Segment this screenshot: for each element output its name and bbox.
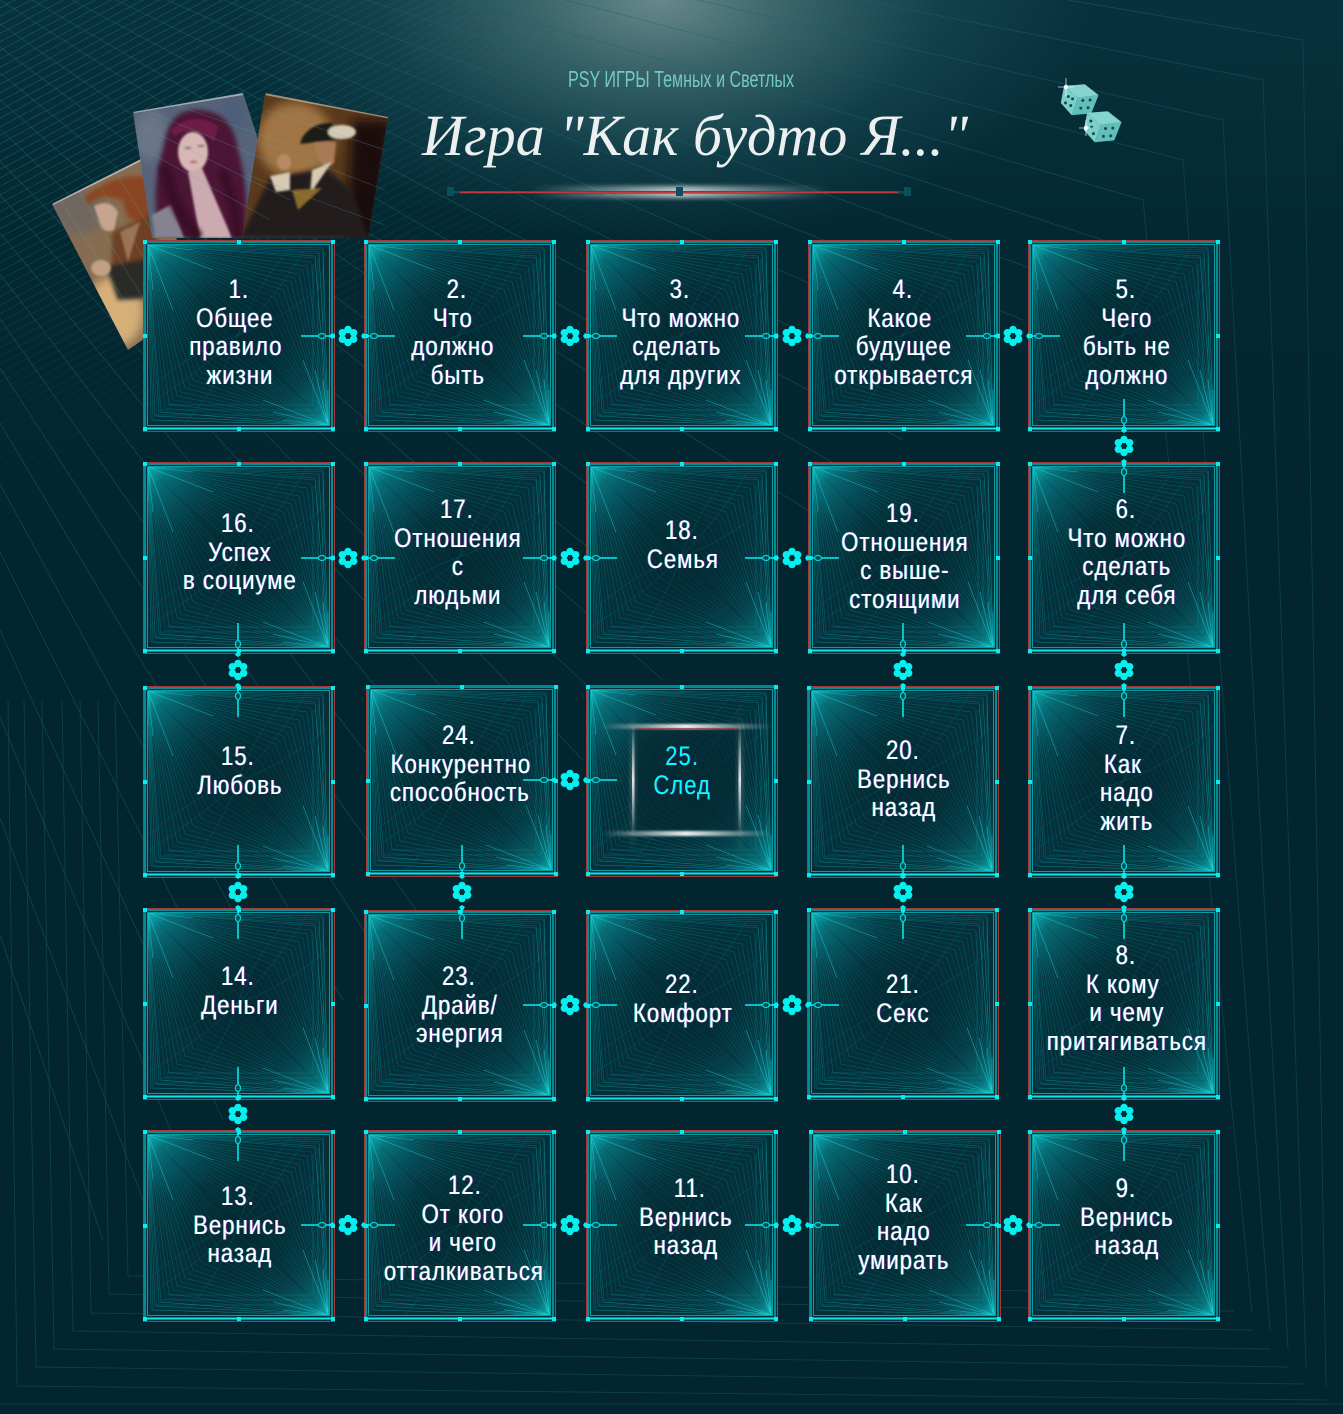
cell 7: жить — [1101, 806, 1153, 836]
cell 11 — [586, 1130, 778, 1322]
cell 4 — [808, 240, 1000, 432]
cell 15: Любовь — [197, 770, 283, 800]
connector 18-19 — [745, 546, 839, 570]
background: upper teal wash — [0, 0, 1343, 480]
cell 8: притягиваться — [1047, 1026, 1207, 1056]
cell 16: Успех — [208, 537, 272, 567]
cell 25: center trace with glowing frame — [586, 685, 778, 877]
cell 4: будущее — [856, 331, 952, 361]
card: musketeer with pipe — [240, 92, 392, 240]
cell 7: 7. — [1116, 720, 1136, 750]
cell 16: в социуме — [183, 565, 297, 595]
cell 20 — [807, 686, 999, 878]
cell 19: стоящими — [849, 584, 961, 614]
cell 11: назад — [654, 1230, 718, 1260]
cell 10: 10. — [886, 1159, 920, 1189]
connector 6-7 — [1114, 623, 1134, 717]
cell 14: 14. — [221, 961, 255, 991]
cell 13 — [143, 1130, 335, 1322]
cell 2: Что — [433, 303, 473, 333]
connector 13-14 — [226, 1067, 250, 1161]
cell 18: 18. — [665, 515, 699, 545]
connector 24-25 — [523, 768, 617, 792]
cell 15: 15. — [221, 741, 255, 771]
cell 11: 11. — [674, 1173, 706, 1203]
cell 4: 4. — [893, 274, 913, 304]
illustration: fanned portrait cards — [52, 93, 388, 350]
cell 8: К кому — [1086, 969, 1160, 999]
cell 5: должно — [1086, 360, 1168, 390]
connector 22-23 — [523, 993, 617, 1017]
connector 14-15 — [226, 845, 250, 939]
cell 9: 9. — [1116, 1173, 1136, 1203]
cell 13: назад — [208, 1238, 272, 1268]
connector 2-3 — [523, 326, 617, 346]
connector 12-13 — [301, 1214, 395, 1236]
cell 8 — [1028, 908, 1220, 1100]
connector 5-6 — [1114, 399, 1134, 493]
cell 9: назад — [1095, 1230, 1159, 1260]
cell 23: 23. — [442, 961, 476, 991]
connector 9-10 — [966, 1214, 1060, 1236]
cell 6: для себя — [1077, 580, 1177, 610]
cell 3: 3. — [670, 274, 690, 304]
connector 15-16 — [226, 623, 250, 717]
cell 10: надо — [877, 1216, 931, 1246]
cell 1: жизни — [207, 360, 273, 390]
cell 25: center trace with glowing frame: След — [653, 770, 711, 800]
cell 22 — [586, 910, 778, 1102]
cell 23 — [364, 910, 556, 1102]
cell 10: Как — [885, 1188, 923, 1218]
cell 17: людьми — [415, 580, 501, 610]
cell 23: Драйв/ — [422, 990, 498, 1020]
connector 21-22 — [745, 993, 839, 1017]
connector 23-24 — [450, 845, 474, 939]
cell 1: правило — [189, 331, 283, 361]
cell 9 — [1028, 1130, 1220, 1322]
cell 20: 20. — [886, 735, 920, 765]
card: woman with burgundy hair — [133, 93, 258, 238]
cell 1 — [143, 240, 335, 432]
cell 16: 16. — [221, 508, 255, 538]
cell 17: с — [452, 551, 464, 581]
connector 1-2 — [301, 326, 395, 346]
card: red-haired man — [52, 160, 177, 350]
cell 7: надо — [1100, 777, 1154, 807]
cell 24: способность — [390, 777, 530, 807]
cell 18: Семья — [647, 544, 719, 574]
icon: dice — [1058, 78, 1122, 142]
cell 11: Вернись — [639, 1202, 733, 1232]
cell 5: 5. — [1116, 274, 1136, 304]
cell 15 — [143, 686, 335, 878]
cell 12 — [364, 1130, 556, 1322]
cell 13: 13. — [221, 1181, 255, 1211]
cell 25: center trace with glowing frame: 25. — [665, 741, 699, 771]
cell 22: Комфорт — [633, 998, 733, 1028]
connector 17-18 — [523, 546, 617, 570]
cell 3: Что можно — [622, 303, 740, 333]
cell 4: открывается — [834, 360, 974, 390]
cell 1: 1. — [229, 274, 249, 304]
connector 4-5 — [966, 326, 1060, 346]
title: Игра "Как будто Я..." — [421, 103, 969, 168]
background: top glow — [230, 0, 1090, 250]
connector 7-8 — [1114, 845, 1134, 939]
cell 20: назад — [872, 792, 936, 822]
cell 18 — [586, 462, 778, 654]
cell 6 — [1028, 462, 1220, 654]
cell 22: 22. — [665, 969, 699, 999]
cell 13: Вернись — [193, 1210, 287, 1240]
cell 4: Какое — [868, 303, 932, 333]
connector 10-11 — [745, 1214, 839, 1236]
connector 20-21 — [891, 845, 915, 939]
cell 17: Отношения — [394, 523, 522, 553]
cell 6: 6. — [1116, 494, 1136, 524]
connector 19-20 — [891, 623, 915, 717]
cell 19: Отношения — [841, 527, 969, 557]
cell 23: энергия — [416, 1018, 504, 1048]
cell 14 — [143, 908, 335, 1100]
cell 21: Секс — [876, 998, 930, 1028]
cell 7 — [1028, 686, 1220, 878]
cell 19 — [808, 462, 1000, 654]
cell 1: Общее — [196, 303, 274, 333]
cell 2: 2. — [447, 274, 467, 304]
cell 16 — [143, 462, 335, 654]
connector 8-9 — [1114, 1067, 1134, 1161]
cell 14: Деньги — [201, 990, 279, 1020]
cell 12: От кого — [422, 1199, 504, 1229]
cell 20: Вернись — [857, 764, 951, 794]
cell 6: сделать — [1083, 551, 1171, 581]
cell 12: отталкиваться — [384, 1256, 544, 1286]
cell 5: Чего — [1102, 303, 1152, 333]
divider under title — [447, 182, 911, 202]
cell 8: 8. — [1116, 940, 1136, 970]
cell 8: и чему — [1090, 997, 1164, 1027]
cell 24: Конкурентно — [391, 749, 531, 779]
cell 3: для других — [620, 360, 742, 390]
cell 12: 12. — [448, 1170, 482, 1200]
cell 6: Что можно — [1068, 523, 1186, 553]
cell 3 — [586, 240, 778, 432]
connector 11-12 — [523, 1214, 617, 1236]
subtitle: PSY ИГРЫ Темных и Светлых — [568, 66, 794, 92]
cell 24 — [366, 685, 558, 877]
cell 19: 19. — [886, 498, 920, 528]
cell 10: умирать — [858, 1245, 950, 1275]
connector 3-4 — [745, 326, 839, 346]
cell 24: 24. — [442, 720, 476, 750]
cell 10 — [809, 1130, 1001, 1322]
cell 2 — [364, 240, 556, 432]
cell 7: Как — [1104, 749, 1142, 779]
cell 2: быть — [431, 360, 485, 390]
background: dense diagonal hatch in upper left — [0, 0, 484, 392]
cell 2: должно — [412, 331, 494, 361]
cell 5: быть не — [1083, 331, 1171, 361]
cell 12: и чего — [429, 1227, 497, 1257]
cell 21: 21. — [886, 969, 920, 999]
cell 5 — [1028, 240, 1220, 432]
cell 21 — [807, 908, 999, 1100]
cell 17: 17. — [440, 494, 474, 524]
cell 3: сделать — [633, 331, 721, 361]
cell 19: с выше- — [860, 555, 950, 585]
connector 16-17 — [301, 546, 395, 570]
cell 17 — [364, 462, 556, 654]
cell 9: Вернись — [1080, 1202, 1174, 1232]
